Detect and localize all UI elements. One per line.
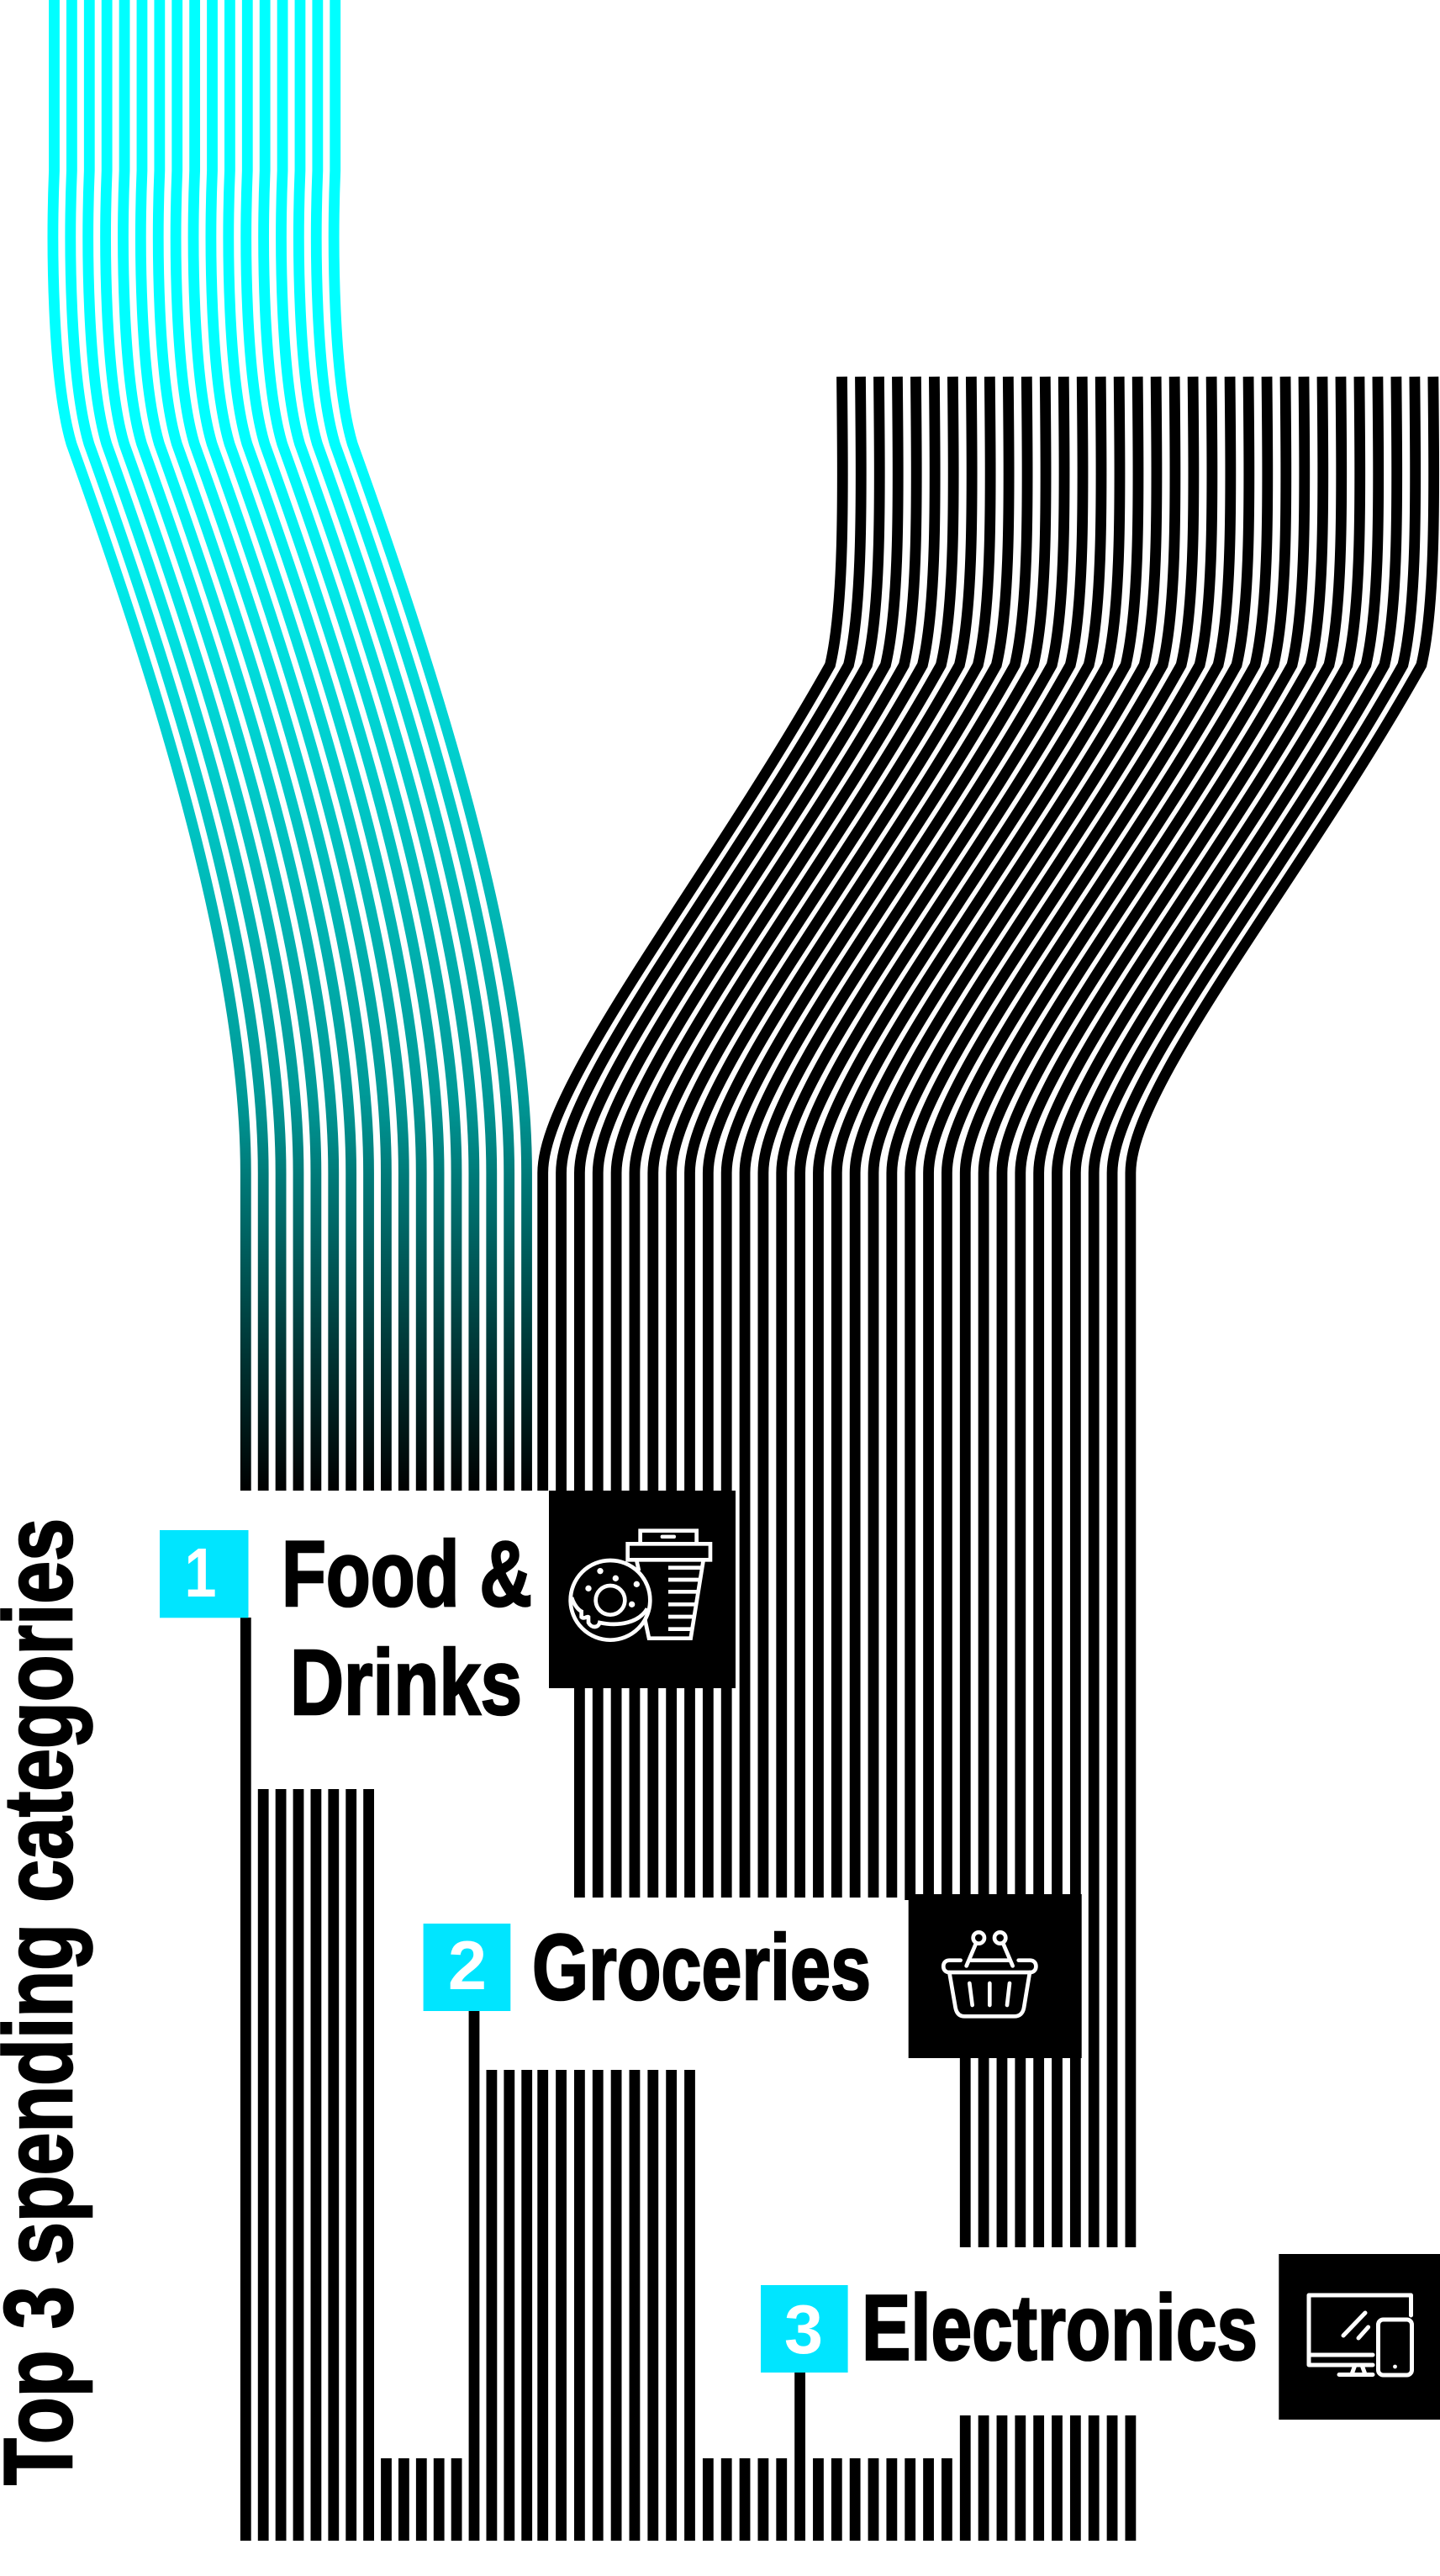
category 2: Groceries bbox=[424, 1894, 1082, 2058]
number badge 1 bbox=[160, 1530, 249, 1618]
icon: donut and drink cup bbox=[549, 1491, 736, 1688]
icon: desktop monitor and phone bbox=[1279, 2254, 1440, 2420]
number badge 2 bbox=[424, 1924, 510, 2011]
category 3: Electronics bbox=[761, 2254, 1440, 2420]
number badge 3 bbox=[761, 2285, 848, 2373]
label: Groceries: Groceries bbox=[532, 1916, 871, 2019]
lower bars below the labels bbox=[245, 1618, 1131, 2541]
category 1: Food & Drinks bbox=[160, 1491, 736, 1734]
black flow of lines bbox=[543, 377, 1434, 2247]
cyan flow of lines bbox=[53, 0, 527, 1491]
label: Electronics: Electronics bbox=[862, 2277, 1258, 2380]
icon: shopping basket bbox=[909, 1894, 1082, 2058]
label: Food & Drinks: Food & bbox=[282, 1523, 532, 1626]
number badge 3: 3 bbox=[784, 2290, 823, 2368]
number badge 1: 1 bbox=[185, 1533, 217, 1612]
label: Food & Drinks: Drinks bbox=[290, 1631, 522, 1734]
label: Food & Drinks bbox=[282, 1523, 532, 1734]
number badge 2: 2 bbox=[448, 1926, 487, 2004]
